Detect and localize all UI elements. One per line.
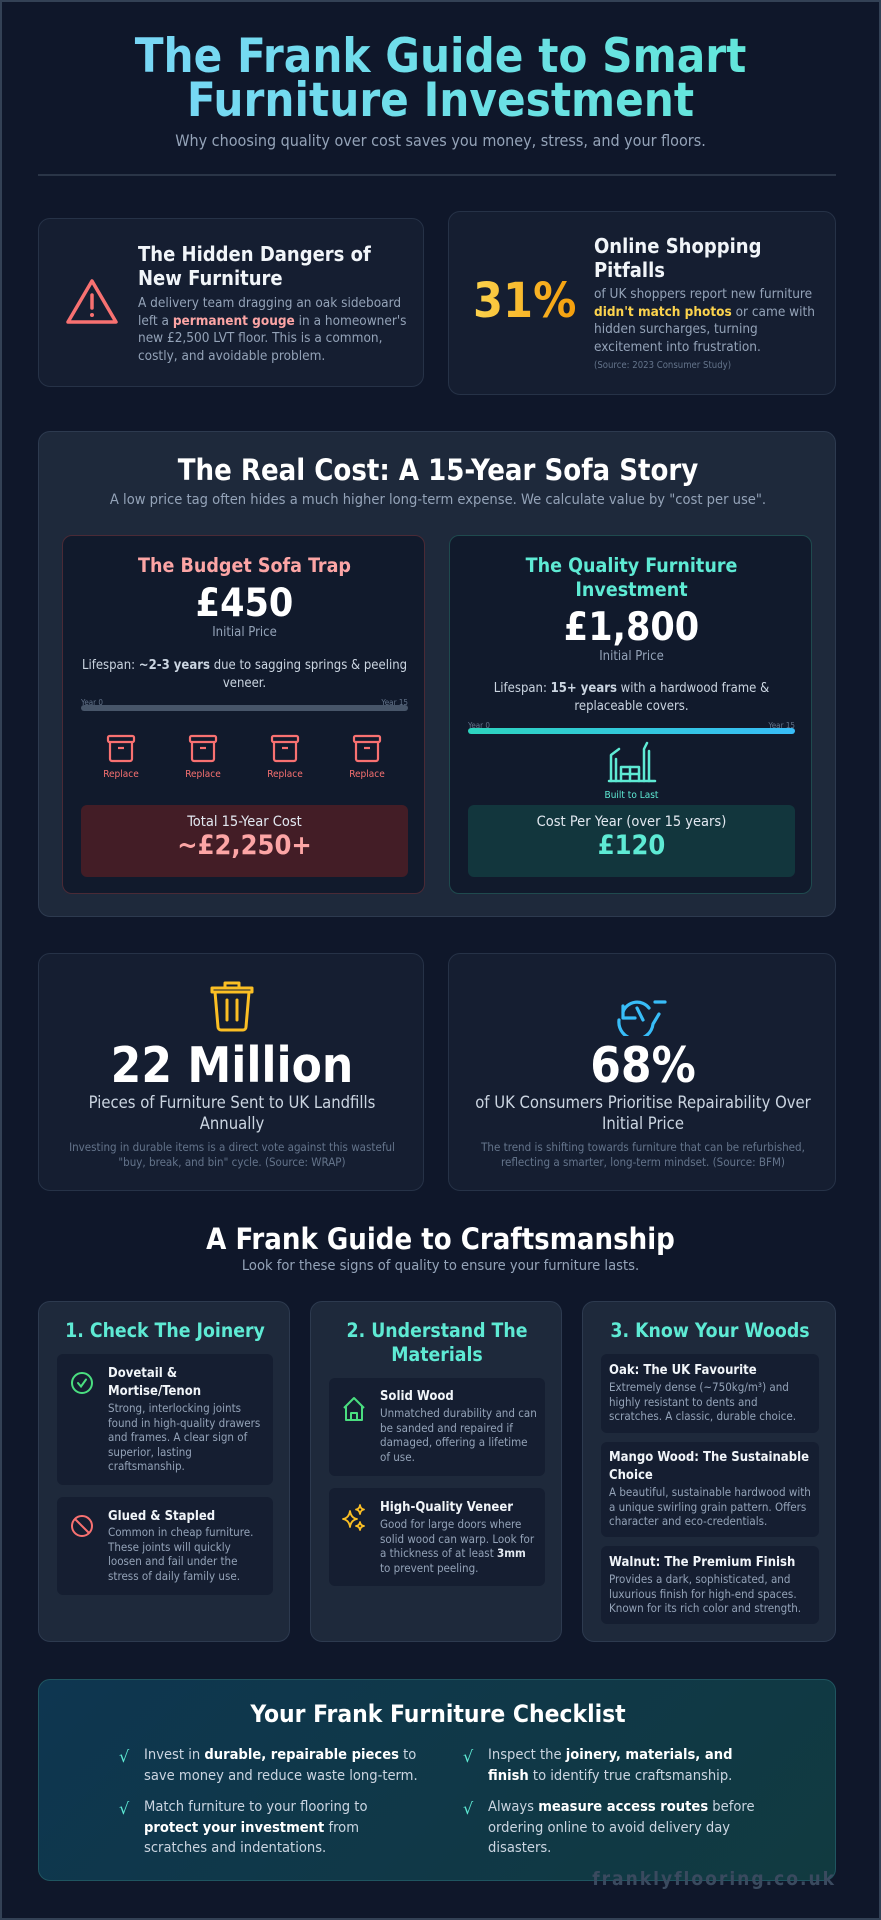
icon: prohibited — [71, 1515, 93, 1537]
panel: landfill stat — [38, 953, 424, 1191]
heading: Materials — [391, 1343, 483, 1366]
title — [0, 35, 881, 123]
panel: woods — [582, 1301, 836, 1642]
item: oak: Extremely dense (~750kg/m³) and highly resistant to dents and scratches. A classic, durable choice. — [609, 1380, 796, 1423]
item: oak: Oak: The UK Favourite — [609, 1363, 757, 1378]
total cost box — [81, 805, 408, 877]
item 1: Invest in durable, repairable pieces to save money and reduce waste long-term. — [144, 1746, 418, 1784]
heading: 2. Understand The — [347, 1319, 527, 1342]
body text: of UK shoppers report new furniture didn't match photos or came with hidden surcharges, turning excitement into frustration. — [594, 286, 815, 354]
icon: sparkles — [342, 1504, 365, 1531]
heading: The Budget Sofa Trap — [138, 554, 351, 577]
icon: recycle — [617, 1000, 667, 1036]
icon: warning triangle — [66, 279, 118, 324]
description: Pieces of Furniture Sent to UK Landfills Annually — [89, 1093, 375, 1132]
item: mango — [601, 1442, 819, 1537]
replace icons: Replace — [267, 769, 303, 780]
item: dovetail: Dovetail & Mortise/Tenon — [108, 1366, 201, 1398]
item: glued: Glued & Stapled — [108, 1509, 215, 1524]
heading: Investment — [575, 578, 688, 601]
source text: Investing in durable items is a direct vote against this wasteful "buy, break, and bin" cycle. (Source: WRAP) — [69, 1140, 395, 1168]
item 2: Match furniture to your flooring to protect your investment from scratches and indentations. — [144, 1798, 367, 1856]
icon: house — [343, 1397, 365, 1421]
description: of UK Consumers Prioritise Repairability Over Initial Price — [475, 1093, 811, 1132]
stat number: 22 Million — [111, 1037, 353, 1094]
sub-panel: quality furniture: Initial Price — [599, 649, 664, 664]
item: mango: Mango Wood: The Sustainable Choice — [609, 1450, 809, 1483]
icon: check circle — [71, 1372, 93, 1394]
icon: trash bin — [210, 982, 254, 1032]
sub-panel: quality furniture — [449, 535, 812, 894]
item: walnut: Walnut: The Premium Finish — [609, 1555, 795, 1570]
sub-panel: budget sofa: Initial Price — [212, 625, 277, 640]
panel: hidden dangers — [38, 218, 424, 387]
heading: 3. Know Your Woods — [610, 1319, 810, 1342]
item 4: Always measure access routes before ordering online to avoid delivery day disasters. — [488, 1798, 755, 1856]
item: solid wood — [329, 1378, 545, 1476]
replace icons: Replace — [185, 769, 221, 780]
heading: The Real Cost: A 15-Year Sofa Story — [178, 453, 698, 487]
replace icons — [103, 734, 385, 780]
item: oak — [601, 1354, 819, 1433]
timeline bar: Year 15 — [768, 721, 795, 730]
item: veneer: High-Quality Veneer — [380, 1500, 513, 1515]
heading: The Quality Furniture — [526, 554, 737, 577]
item 1: √ — [119, 1747, 129, 1766]
item: walnut — [601, 1546, 819, 1624]
subtitle: A low price tag often hides a much higher long-term expense. We calculate value by "cost per use". — [110, 491, 766, 508]
timeline bar — [468, 721, 795, 734]
timeline bar: Year 0 — [468, 721, 490, 730]
stat 31%: 31% — [473, 273, 576, 329]
icon: built to last — [608, 742, 656, 782]
replace icons: Replace — [349, 769, 385, 780]
item 2: √ — [119, 1799, 129, 1818]
panel: joinery — [38, 1301, 290, 1642]
panel: real cost — [38, 431, 836, 917]
watermark: franklyflooring.co.uk — [592, 1868, 836, 1890]
timeline bar — [81, 698, 408, 711]
heading: 1. Check The Joinery — [65, 1319, 265, 1342]
item: solid wood: Unmatched durability and can be sanded and repaired if damaged, offering a lifetime of use. — [380, 1406, 537, 1464]
heading: The Hidden Dangers of New Furniture — [138, 242, 371, 290]
item 3: √ — [463, 1747, 473, 1766]
heading: Online Shopping Pitfalls — [594, 234, 761, 282]
item 4: √ — [463, 1799, 473, 1818]
body text: A delivery team dragging an oak sideboard left a permanent gouge in a homeowner's new £2,500 LVT floor. This is a common, costly, and avoidable problem. — [138, 295, 406, 364]
replace icons: Replace — [103, 769, 139, 780]
cost per year box — [468, 805, 795, 877]
subtitle: Why choosing quality over cost saves you money, stress, and your floors. — [175, 131, 706, 150]
title: The Frank Guide to Smart — [135, 29, 746, 84]
item: solid wood: Solid Wood — [380, 1389, 454, 1404]
section heading: craftsmanship: A Frank Guide to Craftsmanship — [206, 1222, 675, 1256]
section subtitle: Look for these signs of quality to ensure your furniture lasts. — [242, 1257, 639, 1274]
heading — [347, 1319, 527, 1366]
item 3: Inspect the joinery, materials, and finish to identify true craftsmanship. — [488, 1746, 732, 1784]
title: Furniture Investment — [187, 73, 694, 128]
total cost box: Total 15-Year Cost — [187, 814, 302, 830]
item: mango: A beautiful, sustainable hardwood with a unique swirling grain pattern. Offers character and eco-credentials. — [609, 1485, 811, 1528]
lifespan: Lifespan: ~2-3 years due to sagging springs & peeling veneer. — [82, 658, 407, 690]
price: £450 — [196, 581, 293, 626]
cost per year box: £120 — [598, 830, 665, 861]
item: veneer: Good for large doors where solid wood can warp. Look for a thickness of at least 3mm to prevent peeling. — [380, 1517, 534, 1575]
heading — [526, 554, 737, 601]
lifespan: Lifespan: 15+ years with a hardwood frame & replaceable covers. — [494, 681, 769, 714]
stat number: 68% — [590, 1037, 696, 1094]
sub-panel: quality furniture: Built to Last — [605, 790, 658, 801]
sub-panel: budget sofa — [62, 535, 425, 894]
item: walnut: Provides a dark, sophisticated, and luxurious finish for high-end spaces. Known for its rich color and strength. — [609, 1572, 801, 1615]
timeline bar: Year 15 — [381, 698, 408, 707]
source: (Source: 2023 Consumer Study) — [594, 360, 731, 371]
item: dovetail — [57, 1354, 273, 1485]
source text: The trend is shifting towards furniture that can be refurbished, reflecting a smarter, long-term mindset. (Source: BFM) — [481, 1140, 805, 1168]
timeline bar: Year 0 — [81, 698, 103, 707]
cost per year box: Cost Per Year (over 15 years) — [537, 814, 726, 830]
panel: online shopping — [448, 211, 836, 395]
item: dovetail: Strong, interlocking joints found in high-quality drawers and frames. A clear sign of superior, lasting craftsmanship. — [108, 1401, 260, 1473]
panel: materials — [310, 1301, 562, 1642]
item: veneer — [329, 1488, 545, 1586]
price: £1,800 — [564, 605, 699, 650]
panel: checklist — [38, 1679, 836, 1881]
total cost box: ~£2,250+ — [177, 830, 312, 861]
heading: Your Frank Furniture Checklist — [250, 1699, 626, 1728]
panel: repairability stat — [448, 953, 836, 1191]
item: glued: Common in cheap furniture. These joints will quickly loosen and fail under the stress of daily family use. — [108, 1525, 253, 1583]
item: glued — [57, 1497, 273, 1595]
